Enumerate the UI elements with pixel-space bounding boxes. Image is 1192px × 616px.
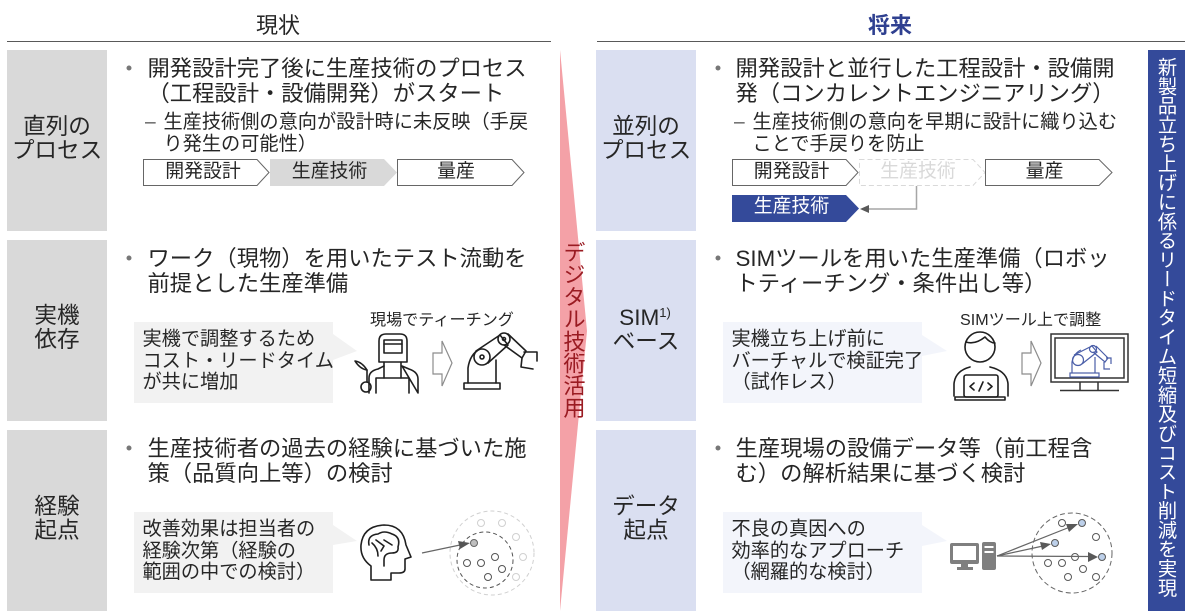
process steps: parallel: 生産技術 bbox=[880, 160, 956, 182]
callout: virtual verification: （試作レス） bbox=[732, 371, 847, 393]
process steps: parallel: 生産技術 bbox=[754, 195, 829, 217]
panel: simulation-based (future) bbox=[596, 240, 1128, 421]
text block: serial process description: 生産技術側の意向が設計時に未反映（手戻 bbox=[164, 111, 528, 133]
callout: virtual verification: バーチャルで検証完了 bbox=[732, 350, 923, 372]
label: SIM base: SIM bbox=[619, 305, 659, 330]
callout: efficient approach bbox=[723, 512, 947, 593]
label: SIM base bbox=[596, 240, 696, 421]
text block: experience description: 策（品質向上等）の検討 bbox=[148, 461, 393, 486]
label: SIM base: 1) bbox=[659, 305, 671, 320]
text block: physical machine description: ワーク（現物）を用いたテスト流動を bbox=[148, 246, 527, 271]
label: experience origin bbox=[7, 430, 107, 611]
callout: improvement depends on personnel: 改善効果は担当者の bbox=[142, 518, 315, 540]
panel: serial process (current) bbox=[7, 50, 528, 231]
callout: cost and lead time increase bbox=[134, 322, 357, 403]
callout: efficient approach: （網羅的な検討） bbox=[732, 561, 885, 583]
label: physical machine dependence: 実機 bbox=[34, 303, 80, 328]
icon: robot arm bbox=[464, 333, 537, 389]
text block: serial process description: り発生の可能性） bbox=[164, 133, 317, 155]
arrow: current step to robot bbox=[433, 341, 452, 386]
banner: overall outcome bbox=[1148, 50, 1185, 611]
label: experience origin: 起点 bbox=[34, 518, 80, 543]
text block: physical machine description: 前提とした生産準備 bbox=[148, 271, 348, 296]
label: data origin: データ bbox=[612, 494, 680, 519]
process steps: serial: 量産 bbox=[437, 160, 475, 182]
caption: on-site teaching: 現場でティーチング bbox=[370, 311, 514, 329]
panel: experience-based (current) bbox=[7, 430, 534, 611]
text block: serial process description bbox=[126, 56, 528, 155]
text block: parallel process description bbox=[716, 56, 1117, 155]
text block: SIM description bbox=[716, 246, 1110, 296]
label: experience origin: 経験 bbox=[34, 494, 80, 519]
chart: limited search within experience bbox=[422, 511, 534, 595]
banner: overall outcome: 新製品立ち上げに係るリードタイム短縮及びコスト削減を実現 bbox=[1154, 57, 1177, 597]
text block: parallel process description: 開発設計と並行した工程設計・設備開 bbox=[736, 56, 1115, 81]
text block: SIM description: SIMツールを用いた生産準備（ロボッ bbox=[736, 246, 1110, 271]
label: parallel process bbox=[596, 50, 696, 231]
icon: welder bbox=[355, 334, 418, 393]
icon: monitor with robot bbox=[1051, 334, 1128, 390]
arrow: digital technology utilisation: デジタル技術活用 bbox=[560, 241, 586, 419]
label: serial process bbox=[7, 50, 107, 231]
process steps: parallel: 量産 bbox=[1026, 160, 1063, 182]
callout: improvement depends on personnel: 範囲の中での検討） bbox=[142, 561, 315, 583]
process steps: serial: 生産技術 bbox=[292, 160, 367, 182]
text block: parallel process description: 生産技術側の意向を早期に設計に織り込む bbox=[752, 111, 1117, 133]
label: data origin: 起点 bbox=[623, 518, 669, 543]
text block: data description: 生産現場の設備データ等（前工程含 bbox=[736, 436, 1092, 461]
heading: future state: 将来 bbox=[868, 13, 912, 38]
text block: parallel process description: – bbox=[734, 112, 745, 133]
text block: serial process description: （工程設計・設備開発）がスタート bbox=[148, 81, 504, 106]
chart: comprehensive data search bbox=[997, 513, 1112, 593]
callout: improvement depends on personnel: 経験次第（経験の bbox=[142, 540, 296, 562]
label: serial process: 直列の bbox=[23, 114, 91, 139]
text block: data description bbox=[716, 436, 1092, 486]
panel: dependence on physical machines (current) bbox=[7, 240, 537, 421]
label: parallel process: 並列の bbox=[612, 114, 680, 139]
panel: data-driven (future) bbox=[596, 430, 1112, 611]
text block: experience description: 生産技術者の過去の経験に基づいた施 bbox=[148, 436, 527, 461]
arrow: programmer to monitor bbox=[1022, 341, 1041, 386]
icon: programmer with laptop bbox=[954, 332, 1008, 400]
process steps: parallel bbox=[732, 160, 1112, 222]
icon: head with brain bbox=[361, 525, 411, 580]
callout: virtual verification: 実機立ち上げ前に bbox=[732, 328, 885, 350]
callout: virtual verification bbox=[723, 322, 947, 403]
process steps: serial: 開発設計 bbox=[165, 160, 241, 182]
label: data origin bbox=[596, 430, 696, 611]
label: parallel process: プロセス bbox=[601, 138, 691, 163]
process steps: serial bbox=[144, 159, 524, 186]
callout: improvement depends on personnel bbox=[134, 512, 357, 593]
label: SIM base: ベース bbox=[613, 329, 679, 354]
text block: physical machine description bbox=[126, 246, 527, 296]
text block: parallel process description: ことで手戻りを防止 bbox=[752, 133, 925, 155]
caption: adjustment on SIM tool: SIMツール上で調整 bbox=[960, 311, 1101, 329]
text block: parallel process description: 発（コンカレントエンジニアリング） bbox=[736, 81, 1115, 106]
label: physical machine dependence bbox=[7, 240, 107, 421]
text block: serial process description: 開発設計完了後に生産技術のプロセス bbox=[148, 56, 527, 81]
panel: parallel process (future) bbox=[596, 50, 1117, 231]
label: serial process: プロセス bbox=[12, 138, 102, 163]
text block: data description: む）の解析結果に基づく検討 bbox=[736, 461, 1025, 486]
text block: SIM description: トティーチング・条件出し等） bbox=[736, 271, 1046, 296]
process steps: parallel: 開発設計 bbox=[754, 160, 829, 182]
callout: efficient approach: 不良の真因への bbox=[732, 518, 866, 540]
arrow: digital technology utilisation bbox=[560, 50, 587, 611]
callout: efficient approach: 効率的なアプローチ bbox=[732, 540, 904, 562]
text block: experience description bbox=[126, 436, 527, 486]
heading: current state: 現状 bbox=[256, 13, 300, 38]
callout: cost and lead time increase: が共に増加 bbox=[142, 371, 238, 393]
callout: cost and lead time increase: 実機で調整するため bbox=[142, 328, 315, 350]
icon: desktop computer bbox=[950, 542, 996, 570]
text block: serial process description: – bbox=[145, 112, 156, 133]
callout: cost and lead time increase: コスト・リードタイム bbox=[142, 350, 334, 372]
label: physical machine dependence: 依存 bbox=[34, 327, 80, 352]
